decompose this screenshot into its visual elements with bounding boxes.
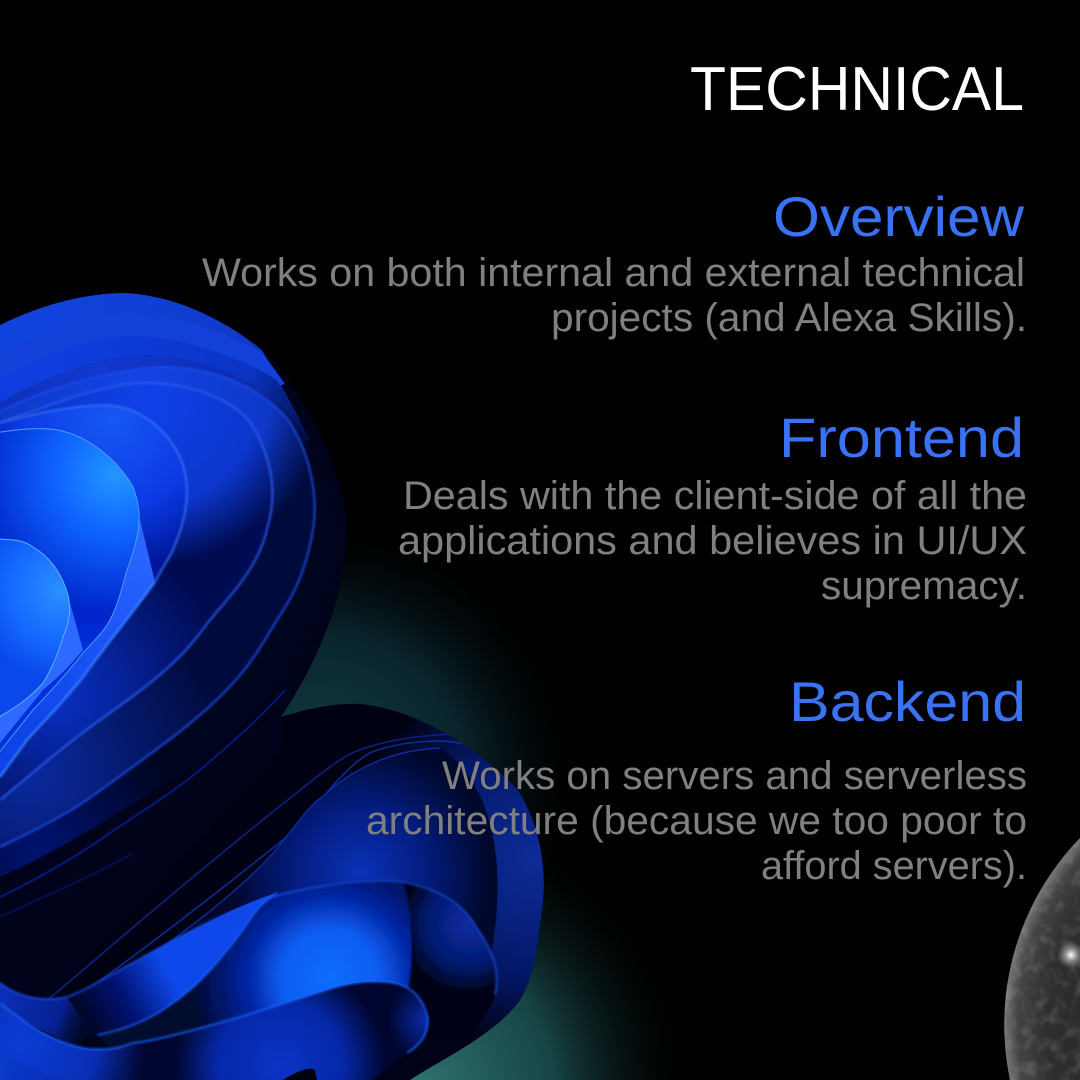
abstract blue flower: [0, 285, 550, 1080]
overview text: [202, 251, 1027, 340]
section: frontend: [398, 406, 1027, 608]
petal: bright: [0, 429, 139, 759]
lobe right shaded fold: [404, 882, 497, 1040]
frontend text: applications and believes in UI/UX: [398, 519, 1027, 563]
lobe fold lines: [48, 734, 464, 999]
lobe far-left band: [0, 983, 90, 1048]
moon bright spot: [1058, 942, 1080, 968]
backend text: afford servers).: [761, 844, 1027, 888]
section: overview: [202, 185, 1027, 340]
top outer petals: [0, 293, 310, 440]
bottom left strip: [14, 1058, 59, 1080]
overview text: projects (and Alexa Skills).: [551, 296, 1027, 340]
lobe under fold: [92, 881, 497, 1080]
teal glow: [0, 510, 700, 1080]
backend text: [366, 754, 1027, 888]
petal: inner: [0, 405, 187, 777]
lower petal faint lines: [0, 690, 285, 917]
petal: dark outer: [0, 356, 337, 877]
edge A highlight: [0, 881, 497, 999]
title: TECHNICAL: [690, 55, 1024, 124]
lower lobe: [282, 704, 544, 1080]
bottom swirl: [283, 1069, 317, 1080]
band upper edge: [162, 747, 440, 946]
bottom fold: [0, 980, 430, 1080]
frontend text: Deals with the client-side of all the: [403, 474, 1027, 518]
lobe central glow: [97, 881, 412, 1050]
lobe blue band: [176, 748, 498, 954]
petal: middle: [0, 383, 272, 800]
bottom fold highlight: [0, 982, 428, 1053]
backend text: Works on servers and serverless: [442, 754, 1027, 798]
overview heading: Overview: [773, 185, 1025, 248]
petal: fold band: [0, 520, 155, 777]
frontend text: supremacy.: [821, 564, 1027, 608]
backend text: architecture (because we too poor to: [366, 799, 1027, 843]
backend heading: Backend: [789, 670, 1026, 733]
petal: outer navy: [0, 367, 315, 847]
petal: inner fold: [0, 603, 83, 743]
moon: [1000, 835, 1080, 1080]
wedge highlight: [97, 893, 277, 1035]
fold band bright edge: [0, 582, 155, 777]
lobe left bright wedge: [68, 893, 277, 1037]
frontend heading: Frontend: [779, 406, 1024, 469]
petal: innermost: [0, 539, 70, 720]
overview text: Works on both internal and external technical: [202, 251, 1025, 295]
frontend text: [398, 474, 1027, 608]
section: backend: [366, 670, 1027, 888]
